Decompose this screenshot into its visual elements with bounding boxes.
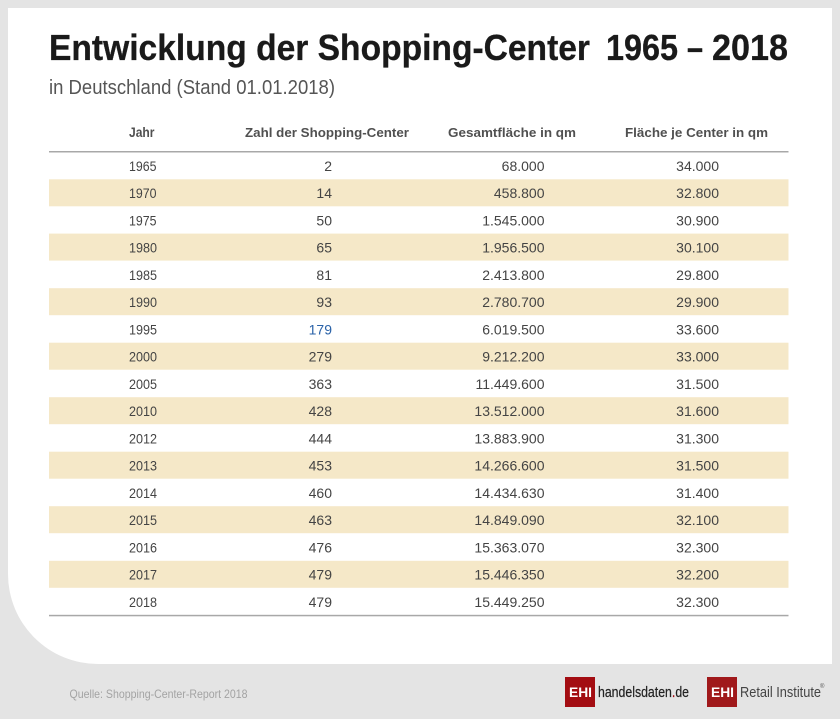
table rows: 476 [309,540,332,556]
table rows: 2014 [129,485,157,501]
table rows: 2010 [129,403,157,419]
table rows: 363 [309,376,332,392]
table rows: 9.212.200 [482,349,545,365]
table rows: 14 [316,185,332,201]
table rows: 463 [309,512,332,528]
title: 2018 [712,27,788,68]
table rows: 2016 [129,540,157,556]
table rows: 32.800 [676,185,719,201]
table rows: 2.413.800 [482,267,545,283]
table rows: 32.100 [676,512,719,528]
table rows: 31.500 [676,376,719,392]
table rows: 31.500 [676,458,719,474]
table rows: 2005 [129,376,157,392]
table header: Zahl der Shopping-Center [245,125,409,140]
table rows: 29.800 [676,267,719,283]
table rows: 29.900 [676,294,719,310]
table rows: 81 [316,267,332,283]
table rows: 179 [309,322,332,338]
table rows: 1995 [129,322,157,338]
table rows: 30.900 [676,212,719,228]
table header: Fläche je Center in qm [625,125,768,140]
table rows: 2013 [129,458,157,474]
title: 1965 [606,27,678,68]
table rows: 14.849.090 [474,512,545,528]
table rows: 2 [324,158,332,174]
table rows: 460 [309,485,332,501]
table rows: 444 [309,430,332,446]
table rows: 453 [309,458,332,474]
table rows: 2012 [129,430,157,446]
logo: EHI Retail Institute: ® [820,683,825,690]
table rows: 32.300 [676,594,719,610]
table [49,124,788,616]
table rows: 14.266.600 [474,458,545,474]
table rows: 2018 [129,594,157,610]
table rows: 50 [316,212,332,228]
table rows: 65 [316,240,332,256]
source note: Quelle: Shopping-Center-Report 2018 [70,687,248,701]
table rows: 14.434.630 [474,485,545,501]
table rows: 34.000 [676,158,719,174]
table rows: 1985 [129,267,157,283]
row stripes [49,179,788,588]
table rows: 15.446.350 [474,567,545,583]
table rows: 31.400 [676,485,719,501]
table rows: 479 [309,594,332,610]
table rows: 1.545.000 [482,212,545,228]
table rows: 279 [309,349,332,365]
table rows: 33.600 [676,322,719,338]
subtitle: in Deutschland (Stand 01.01.2018) [49,77,335,99]
table rows: 1980 [129,240,157,256]
table rows: 1970 [129,185,157,201]
table rows: 93 [316,294,332,310]
table rows: 1965 [129,158,157,174]
table header: Jahr [129,124,155,140]
logo: EHI handelsdaten.de: EHI [569,684,592,700]
table rows: 11.449.600 [475,376,545,392]
table rows: 1990 [129,294,157,310]
table rows: 2000 [129,349,157,365]
logo: EHI Retail Institute: EHI [711,684,734,700]
table rows: 2015 [129,512,157,528]
table rows: 31.300 [676,430,719,446]
table rows: 15.449.250 [474,594,545,610]
table rows [129,158,719,610]
table header [129,124,768,140]
logo: EHI Retail Institute [707,677,825,707]
title: – [687,27,703,68]
table rows: 13.883.900 [474,430,545,446]
table rows: 33.000 [676,349,719,365]
table rows: 6.019.500 [482,322,545,338]
table rows: 458.800 [494,185,545,201]
table rows: 428 [309,403,332,419]
table rows: 15.363.070 [474,540,545,556]
logo: EHI Retail Institute: Retail Institute [740,684,821,701]
table rows: 2017 [129,567,157,583]
table rows: 30.100 [676,240,719,256]
table rows: 13.512.000 [474,403,545,419]
logo: EHI handelsdaten.de: handelsdaten.de [598,684,689,701]
table rows: 31.600 [676,403,719,419]
table rows: 1975 [129,212,157,228]
table rows: 479 [309,567,332,583]
table rows: 1.956.500 [482,240,545,256]
title: Entwicklung der Shopping-Center [49,27,590,68]
table rows: 32.200 [676,567,719,583]
table rows: 68.000 [502,158,545,174]
table header: Gesamtfläche in qm [448,125,576,140]
table rows: 2.780.700 [482,294,545,310]
table rows: 32.300 [676,540,719,556]
logo: EHI handelsdaten.de [565,677,689,707]
